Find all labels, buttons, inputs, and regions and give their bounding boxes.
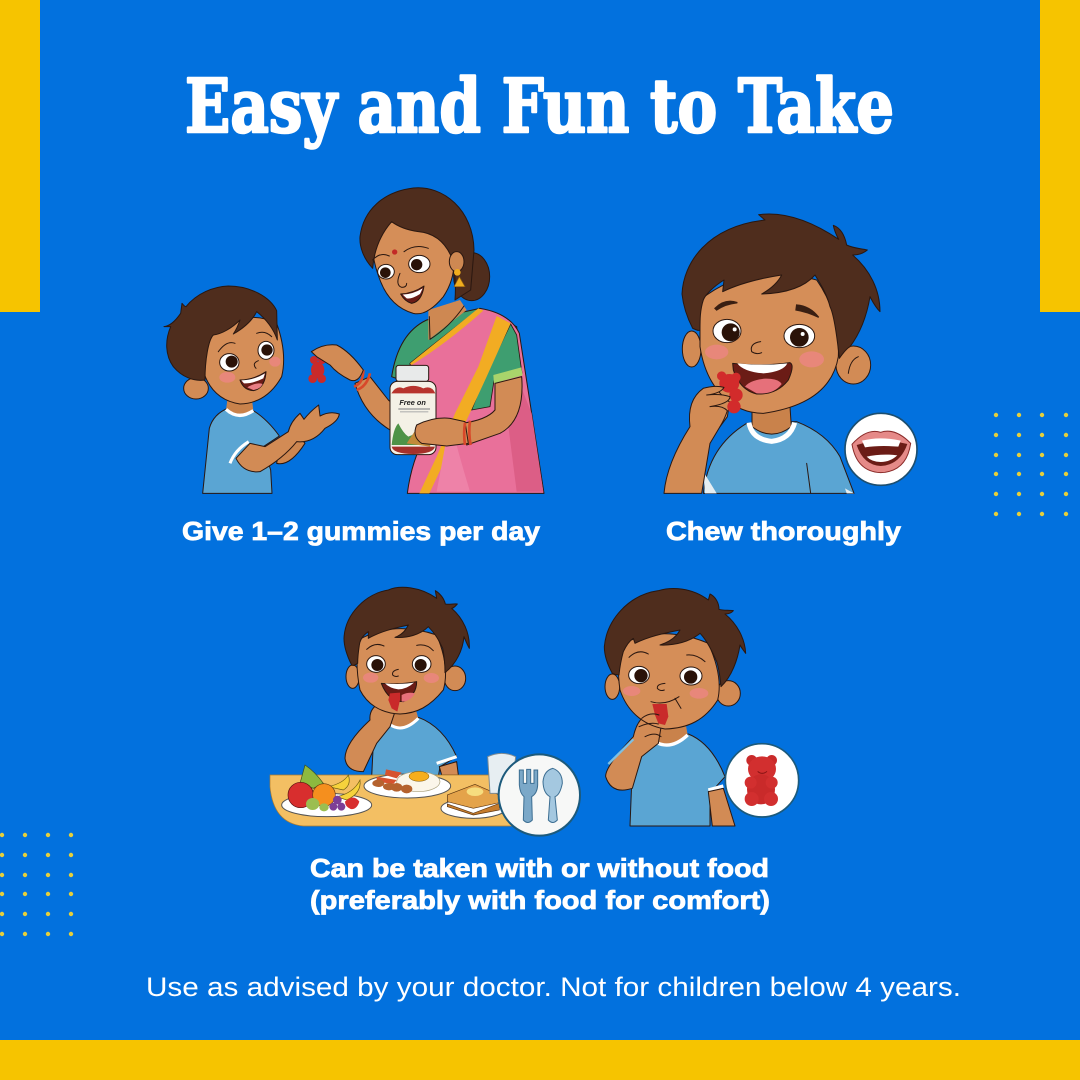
table	[270, 775, 523, 826]
boy: cheeks	[219, 372, 235, 383]
mother: hair	[360, 188, 474, 300]
eyes	[629, 666, 649, 684]
mother: saree band	[419, 316, 511, 493]
gummy held by mother	[308, 356, 326, 383]
boy: far arm	[277, 433, 305, 464]
boy: face	[203, 317, 284, 404]
neck	[657, 720, 688, 745]
illustration: boy with gummy	[604, 588, 799, 826]
mother: jar hand	[415, 418, 468, 446]
eyes	[713, 319, 741, 343]
dot pattern: left	[0, 833, 73, 936]
gummy bear icon badge	[725, 744, 799, 817]
mother: bindi	[392, 249, 397, 255]
illustration: boy eating with food	[270, 587, 580, 836]
far arm	[708, 788, 735, 826]
boy: shirt	[203, 408, 279, 493]
face	[700, 273, 838, 413]
closed mouth	[651, 697, 681, 708]
arm and hand	[664, 385, 730, 493]
gummy jar	[390, 365, 436, 455]
mother: right blouse panel	[472, 324, 522, 410]
face	[357, 629, 446, 714]
near arm	[606, 711, 662, 790]
mother: neck	[428, 300, 467, 340]
gummy bear	[717, 371, 743, 413]
boy: eyes	[220, 354, 239, 371]
cheeks	[363, 673, 378, 683]
neck	[752, 407, 791, 434]
nose	[751, 342, 762, 354]
hair	[682, 214, 880, 358]
shirt	[703, 422, 854, 493]
illustration: boy chewing	[664, 214, 917, 493]
cheeks	[705, 345, 728, 359]
nose	[393, 669, 398, 676]
title: Easy and Fun to Take	[185, 64, 894, 150]
gummy	[388, 693, 400, 712]
boy: neck	[226, 397, 253, 416]
mother: gummy hand	[311, 345, 363, 381]
mouth	[733, 363, 792, 394]
face	[618, 634, 719, 729]
boy: ear	[184, 378, 208, 399]
boy: hair	[164, 286, 277, 380]
ears	[605, 674, 620, 699]
ears	[346, 665, 359, 688]
mother: bangles	[354, 370, 370, 390]
mother: saree	[407, 308, 544, 493]
lips icon badge	[845, 413, 917, 485]
shirt	[630, 734, 725, 826]
step label: with or without food: (preferably with food for comfort)	[310, 885, 770, 915]
mother: blouse and torso	[392, 308, 522, 410]
gummy	[652, 704, 668, 725]
step label: give gummies: Give 1–2 gummies per day	[182, 516, 541, 546]
mouth	[381, 682, 417, 702]
hair	[344, 587, 469, 673]
arm	[345, 698, 395, 772]
toast plate	[441, 784, 506, 818]
milk glass	[488, 753, 516, 793]
egg plate	[364, 769, 451, 798]
nose	[657, 683, 665, 691]
yellow bar: bottom	[0, 1040, 1080, 1080]
mother: far arm	[355, 377, 403, 430]
step label: with or without food: Can be taken with or without food	[310, 853, 769, 883]
boy: mouth	[240, 372, 266, 391]
hair	[604, 588, 746, 687]
cheeks	[623, 686, 640, 696]
illustration: mother giving gummy to boy	[164, 188, 544, 493]
dot pattern: right	[994, 413, 1068, 516]
fruit plate	[282, 765, 372, 817]
boy: near arm and hands	[236, 405, 339, 472]
mother: near arm	[462, 377, 522, 445]
mother: bun	[454, 253, 490, 301]
fingers	[703, 386, 730, 427]
mother: ear and earring	[449, 252, 464, 272]
mother: face	[372, 222, 454, 314]
step label: with or without food	[310, 853, 770, 915]
neck	[391, 707, 418, 728]
mother: eyes	[378, 264, 394, 279]
cutlery icon badge	[499, 754, 580, 836]
gummy jar: Free on	[399, 398, 426, 407]
eyes	[367, 656, 385, 672]
shirt	[370, 717, 457, 777]
step label: chew: Chew thoroughly	[666, 516, 902, 546]
fingers	[639, 714, 661, 737]
mother: smile	[401, 286, 424, 303]
yellow corner bar: top left	[0, 0, 40, 312]
eyebrows	[715, 301, 819, 317]
yellow corner bar: top right	[1040, 0, 1080, 312]
ears	[682, 331, 701, 367]
disclaimer: Use as advised by your doctor. Not for children below 4 years.	[146, 972, 961, 1002]
